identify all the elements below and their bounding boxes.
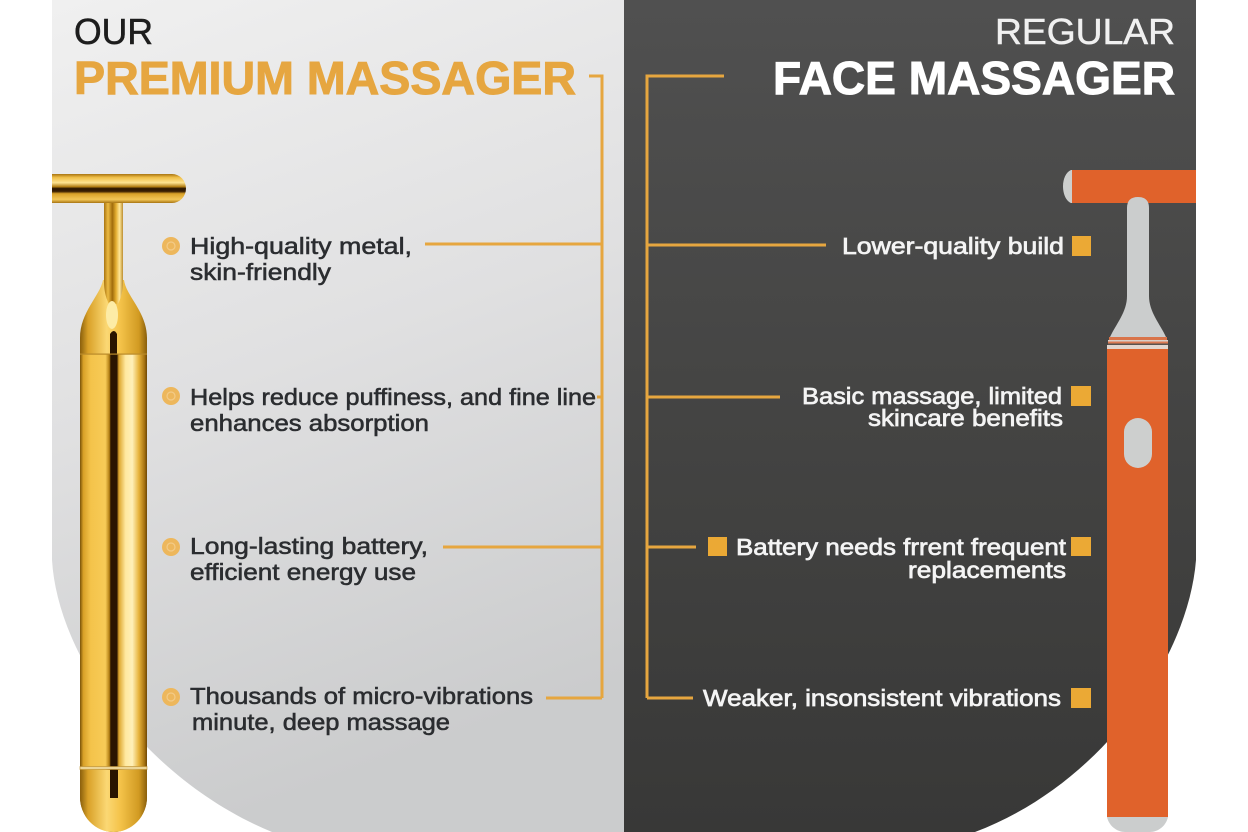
feature: battery replacements	[708, 534, 1091, 583]
panel: regular face massager background	[624, 0, 1196, 832]
icon: orange square right	[1071, 537, 1091, 556]
gold dark reflection top	[110, 331, 117, 354]
heading: regular face massager	[773, 11, 1175, 104]
heading: our premium massager: PREMIUM MASSAGER	[74, 52, 576, 104]
feature: long-lasting battery: efficient energy use	[190, 559, 416, 585]
power button	[1124, 418, 1152, 468]
grey collar rings	[1107, 337, 1168, 349]
feature: battery replacements: replacements	[908, 557, 1066, 583]
feature: micro-vibrations: minute, deep massage	[192, 709, 450, 735]
feature: micro-vibrations	[162, 683, 533, 735]
connector lines: premium side	[425, 76, 602, 698]
heading: our premium massager: OUR	[74, 11, 153, 52]
heading: regular face massager: FACE MASSAGER	[773, 52, 1175, 104]
feature: long-lasting battery	[162, 533, 428, 585]
feature: reduces puffiness: Helps reduce puffiness, and fine line	[190, 384, 596, 410]
feature: micro-vibrations: Thousands of micro-vibrations	[190, 683, 533, 709]
gold ring	[80, 766, 147, 770]
panel: premium massager background	[52, 0, 624, 832]
feature: basic massage: skincare benefits	[868, 405, 1063, 431]
feature: lower-quality build: Lower-quality build	[842, 233, 1064, 259]
feature: high-quality metal	[162, 233, 412, 285]
gold highlight	[106, 301, 118, 329]
feature: long-lasting battery: Long-lasting battery,	[190, 533, 428, 559]
orange body	[1107, 349, 1168, 817]
feature: basic massage: Basic massage, limited	[802, 383, 1062, 409]
gold shoulder	[80, 280, 147, 356]
orange T-bar	[1072, 170, 1196, 203]
feature: reduces puffiness	[162, 384, 596, 436]
feature: reduces puffiness: enhances absorption	[190, 410, 429, 436]
heading: our premium massager	[74, 11, 576, 104]
illustration: orange T-bar massager	[1063, 170, 1196, 832]
feature: basic massage	[802, 383, 1091, 431]
connector lines: regular side	[647, 76, 826, 698]
feature: high-quality metal: skin-friendly	[190, 259, 332, 285]
feature: high-quality metal: High-quality metal,	[190, 233, 412, 259]
gold neck	[104, 200, 123, 304]
gold body	[80, 354, 147, 832]
icon: gold bullet	[162, 387, 180, 405]
gold body lower cap	[80, 770, 147, 832]
icon: orange square left	[708, 537, 727, 556]
grey bottom cap	[1107, 817, 1168, 832]
icon: orange square	[1071, 386, 1091, 406]
icon: gold bullet	[162, 538, 180, 556]
grey cap on bar	[1063, 170, 1072, 203]
illustration: gold T-bar massager	[52, 174, 186, 832]
feature: battery replacements: Battery needs frrent frequent	[736, 534, 1067, 560]
gold seam top	[80, 354, 147, 355]
icon: gold bullet	[162, 237, 180, 255]
feature: weaker vibrations: Weaker, insonsistent vibrations	[703, 685, 1061, 711]
gold dark reflection bottom	[110, 770, 118, 798]
heading: regular face massager: REGULAR	[995, 11, 1175, 52]
grey neck	[1110, 197, 1166, 337]
gold T-bar	[52, 174, 186, 203]
icon: orange square	[1071, 688, 1091, 708]
icon: orange square	[1072, 236, 1091, 256]
icon: gold bullet	[162, 688, 180, 706]
